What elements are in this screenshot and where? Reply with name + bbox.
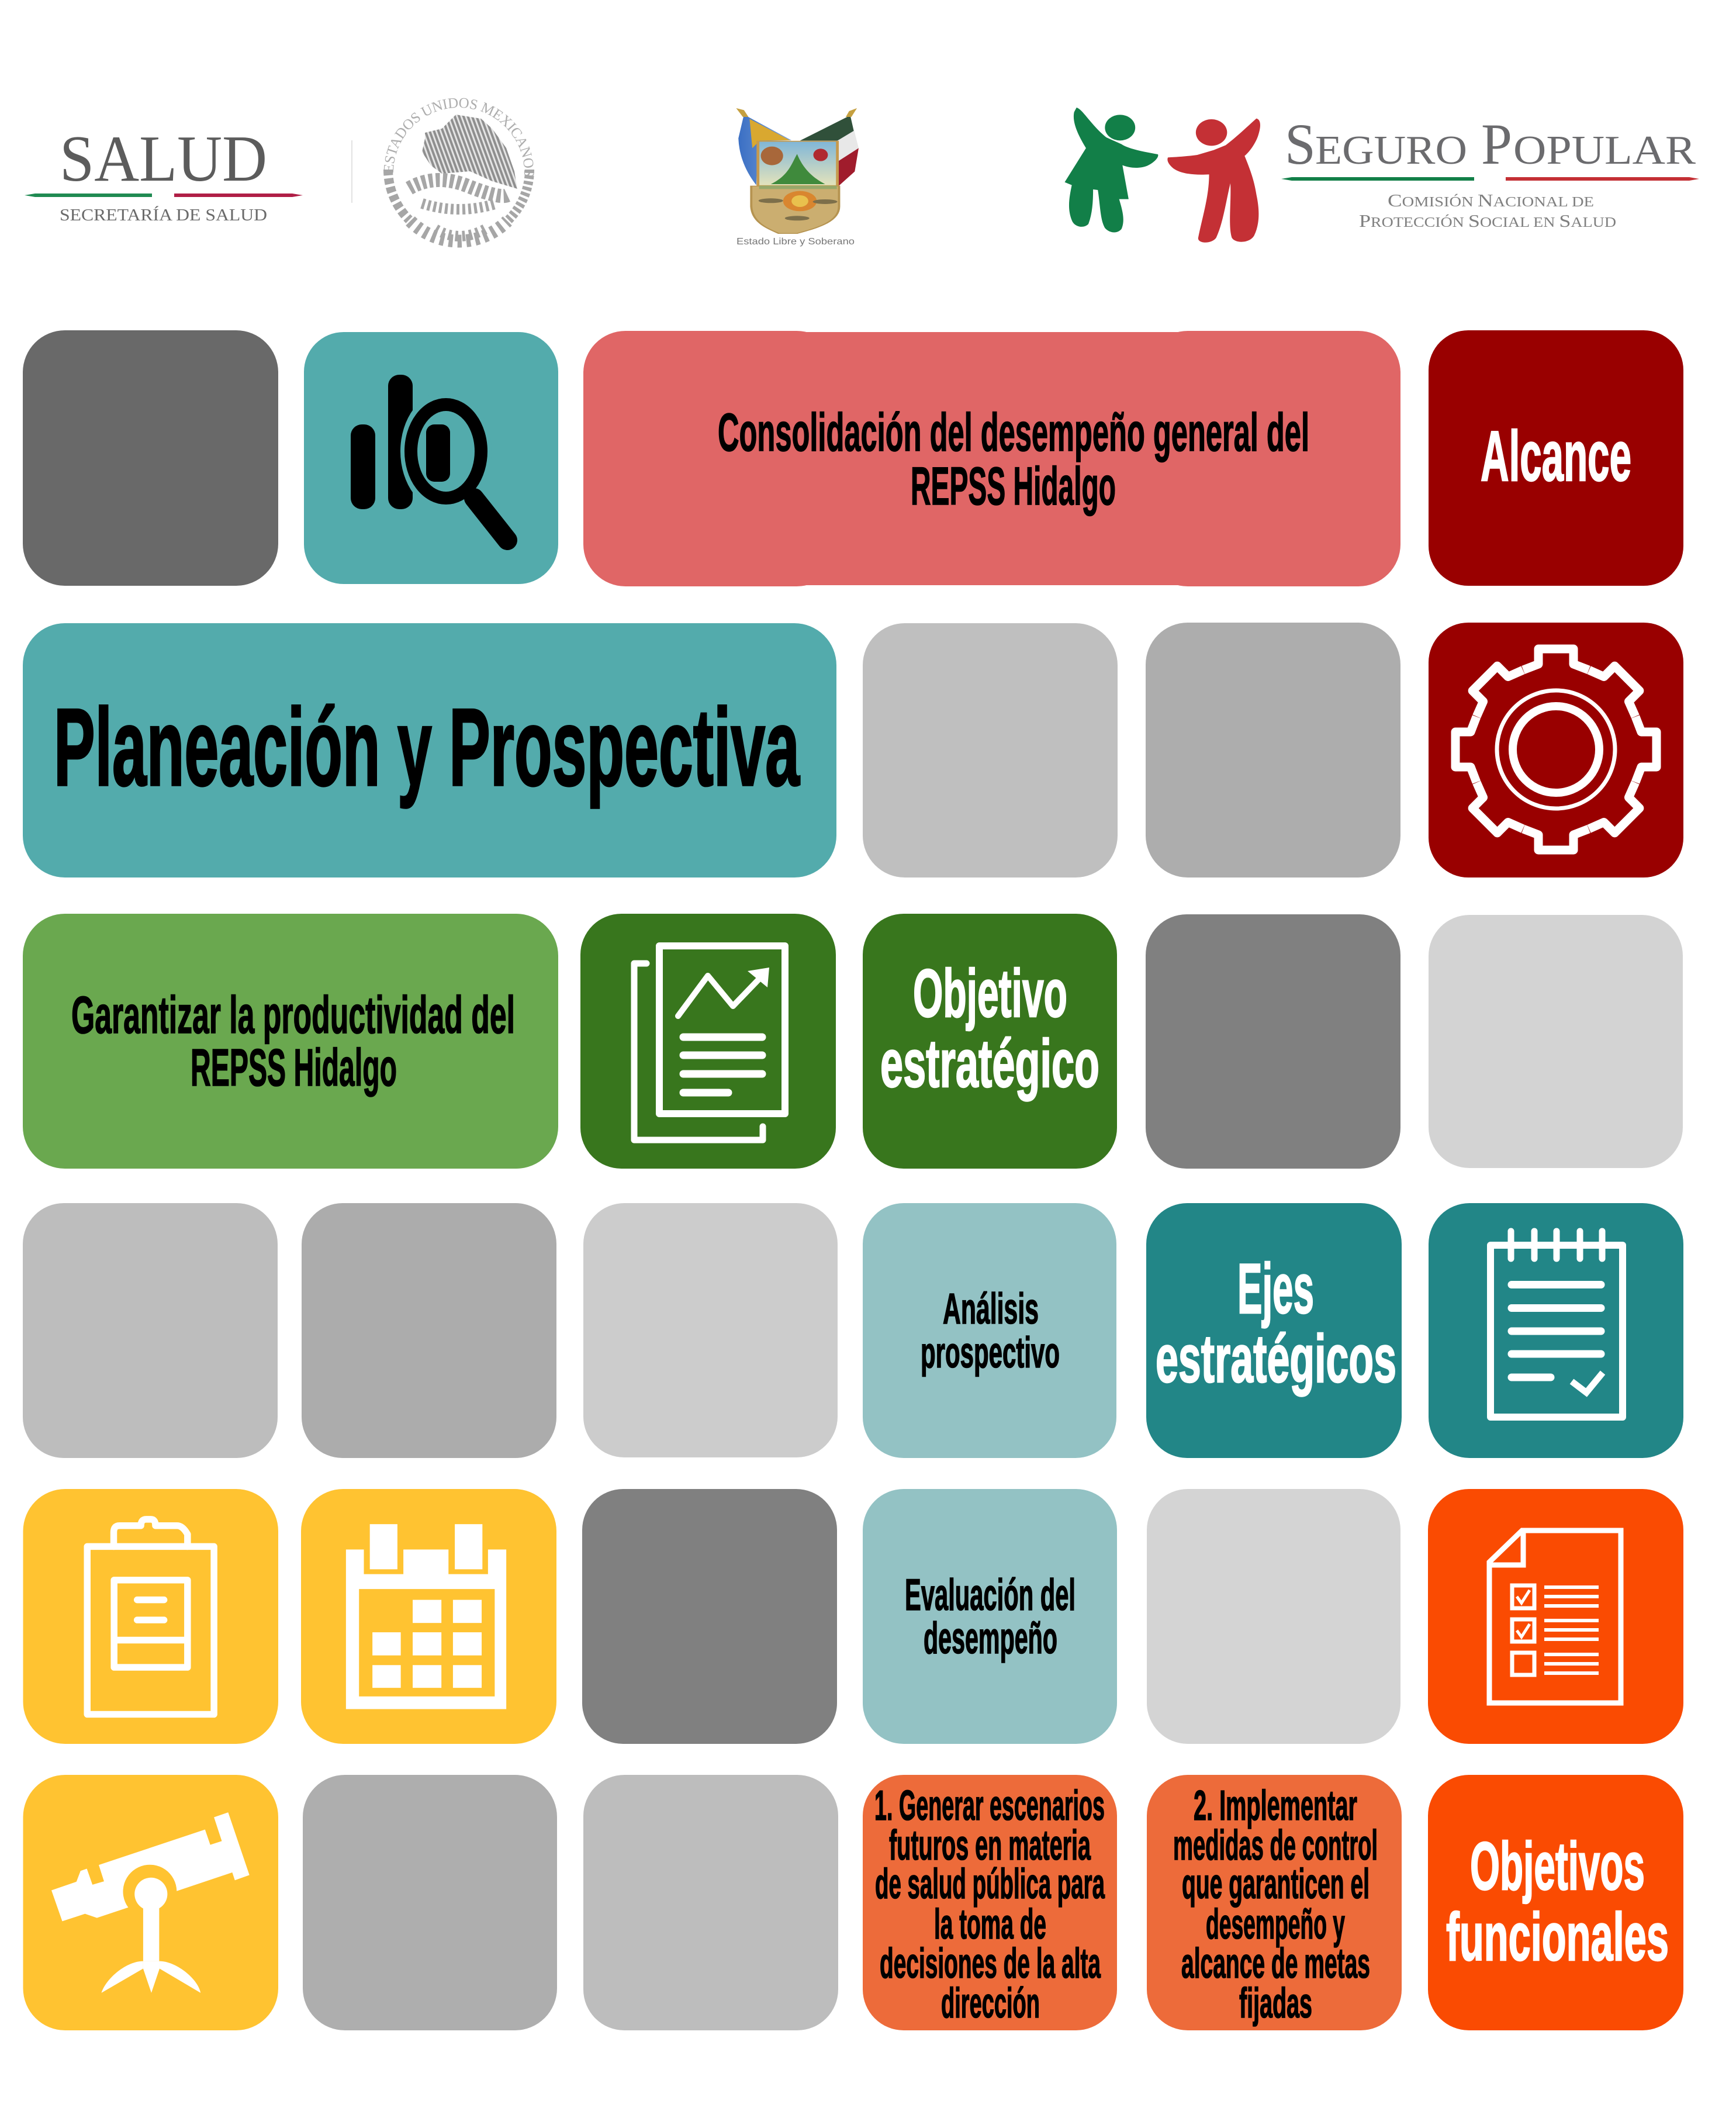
- red child figure: [1167, 119, 1260, 243]
- tile: scope statement: [583, 331, 1400, 586]
- tile: report icon: [580, 914, 836, 1169]
- tile: Evaluación del desempeño: desempeño: [924, 1614, 1057, 1663]
- logo: Seguro Popular: [1065, 108, 1699, 243]
- tile: functional objective 2: que garanticen el: [1182, 1861, 1370, 1908]
- left flag: [738, 115, 791, 185]
- green child figure: [1065, 108, 1158, 232]
- row 6: [23, 1775, 1683, 2030]
- mountain: [771, 154, 825, 184]
- tile: Objetivo estratégico: estratégico: [880, 1025, 1099, 1101]
- tile: blank light gray: [1429, 915, 1683, 1168]
- tile: strategic objective text: [23, 914, 558, 1169]
- icon: clipboard: [87, 1519, 214, 1714]
- logo: national seal, Estados Unidos Mexicanos: [383, 98, 534, 248]
- tile: blank gray: [863, 623, 1118, 877]
- icon: notepad checklist: [1491, 1231, 1623, 1417]
- tile: Evaluación del desempeño: Evaluación del: [905, 1570, 1076, 1620]
- tile: functional objective 1: de salud pública para: [875, 1861, 1105, 1908]
- subtitle: Secretaría de Salud: SECRETARÍA DE SALUD: [60, 205, 267, 224]
- tile: Ejes estratégicos: Ejes: [1237, 1249, 1314, 1328]
- tile: Objetivos funcionales: [1428, 1775, 1683, 2030]
- tile: main title: Planeación y Prospectiva: [54, 686, 800, 809]
- tile: Ejes estratégicos: estratégicos: [1156, 1321, 1396, 1397]
- tile: Alcance: [1429, 330, 1683, 586]
- tile: Objetivo estratégico: Objetivo: [913, 955, 1067, 1031]
- tile: clipboard icon: [23, 1489, 278, 1744]
- commission name: PROTECCIÓN SOCIAL EN SALUD: [1359, 210, 1616, 231]
- icon: bars and magnifying glass: [351, 375, 507, 540]
- tile: notepad icon: [1429, 1203, 1683, 1458]
- icon: gear: [1455, 649, 1657, 850]
- tile: blank gray: [1146, 914, 1400, 1169]
- tile: blank dark gray: [23, 330, 278, 586]
- tile: functional objective 1: futuros en materia: [889, 1822, 1091, 1869]
- wordmark: Seguro Popular: S: [1285, 112, 1316, 177]
- tile: Análisis prospectivo: [863, 1203, 1116, 1458]
- tile: Objetivo estratégico: [863, 914, 1117, 1169]
- right flag: [800, 115, 854, 141]
- icon: telescope: [51, 1812, 250, 1993]
- tile: functional objective 2: medidas de control: [1173, 1822, 1378, 1869]
- tile: blank light gray: [583, 1203, 838, 1457]
- icon: document with growth chart: [634, 946, 785, 1140]
- tile: strategic objective text: REPSS Hidalgo: [191, 1039, 397, 1097]
- tile: blank gray: [23, 1203, 278, 1458]
- coat of arms caption: Estado Libre y Soberano: [736, 237, 855, 247]
- tile: blank gray: [583, 1775, 838, 2030]
- row 4: [23, 1203, 1683, 1458]
- tile: functional objective 1: [863, 1775, 1117, 2030]
- commission name: [1359, 190, 1616, 231]
- seal circular text: ESTADOS UNIDOS MEXICANOS: [383, 98, 534, 175]
- tile: blank gray: [1146, 623, 1400, 877]
- shield lower: [751, 186, 839, 233]
- tile: functional objective 2: desempeño y: [1206, 1901, 1345, 1948]
- tile: blank light gray: [1147, 1489, 1400, 1744]
- shield upper: [758, 141, 838, 186]
- commission name: COMISIÓN NACIONAL DE: [1388, 190, 1594, 210]
- row 5: [23, 1489, 1683, 1744]
- row 2: [23, 623, 1683, 877]
- tile: scope statement: REPSS Hidalgo: [911, 457, 1116, 516]
- wordmark: Seguro Popular: EGURO: [1315, 128, 1467, 173]
- wordmark: Seguro Popular: [1285, 112, 1696, 177]
- logo: coat of arms, Hidalgo: [736, 108, 859, 247]
- tile: functional objective 1: la toma de: [934, 1901, 1046, 1948]
- row 3: [23, 914, 1683, 1169]
- tile: main title: [23, 623, 836, 877]
- tile: functional objective 1: dirección: [941, 1980, 1040, 2027]
- wordmark: Seguro Popular: P: [1481, 112, 1512, 177]
- tile: blank gray: [582, 1489, 837, 1744]
- tricolor bar: [25, 194, 303, 197]
- tile: functional objective 2: [1147, 1775, 1402, 2030]
- cactus and wreath: [388, 170, 530, 241]
- tile: checklist icon: [1428, 1489, 1683, 1744]
- tile: blank gray: [302, 1203, 556, 1458]
- wordmark: SALUD: SALUD: [60, 123, 267, 195]
- tile: telescope icon: [23, 1775, 278, 2030]
- wordmark: Seguro Popular: OPULAR: [1513, 128, 1696, 173]
- tile: functional objective 1: decisiones de la alta: [880, 1940, 1101, 1987]
- tile: Ejes estratégicos: [1146, 1203, 1402, 1458]
- tile: functional objective 1: 1. Generar escenarios: [874, 1782, 1105, 1829]
- tile: functional objective 2: fijadas: [1239, 1980, 1312, 2027]
- tile: Análisis prospectivo: prospectivo: [921, 1328, 1060, 1377]
- tile: magnifier icon: [304, 332, 558, 584]
- tile: functional objective 2: alcance de metas: [1181, 1940, 1370, 1987]
- eagle: [422, 115, 517, 189]
- tile: Evaluación del desempeño: [863, 1489, 1117, 1744]
- tricolor bar: [1281, 177, 1699, 181]
- tile: Análisis prospectivo: Análisis: [943, 1284, 1039, 1333]
- tile: calendar icon: [301, 1489, 556, 1744]
- logo: Salud, Secretaría de Salud: [25, 123, 352, 224]
- row 1: [23, 330, 1683, 586]
- tile: strategic objective text: Garantizar la productividad del: [71, 986, 515, 1045]
- icon: calendar: [346, 1524, 506, 1709]
- tile: blank gray: [303, 1775, 557, 2030]
- tile: functional objective 2: 2. Implementar: [1194, 1782, 1357, 1829]
- tile: gear icon: [1429, 623, 1683, 877]
- icon: checklist document: [1489, 1531, 1621, 1703]
- heraldic details: [759, 147, 838, 220]
